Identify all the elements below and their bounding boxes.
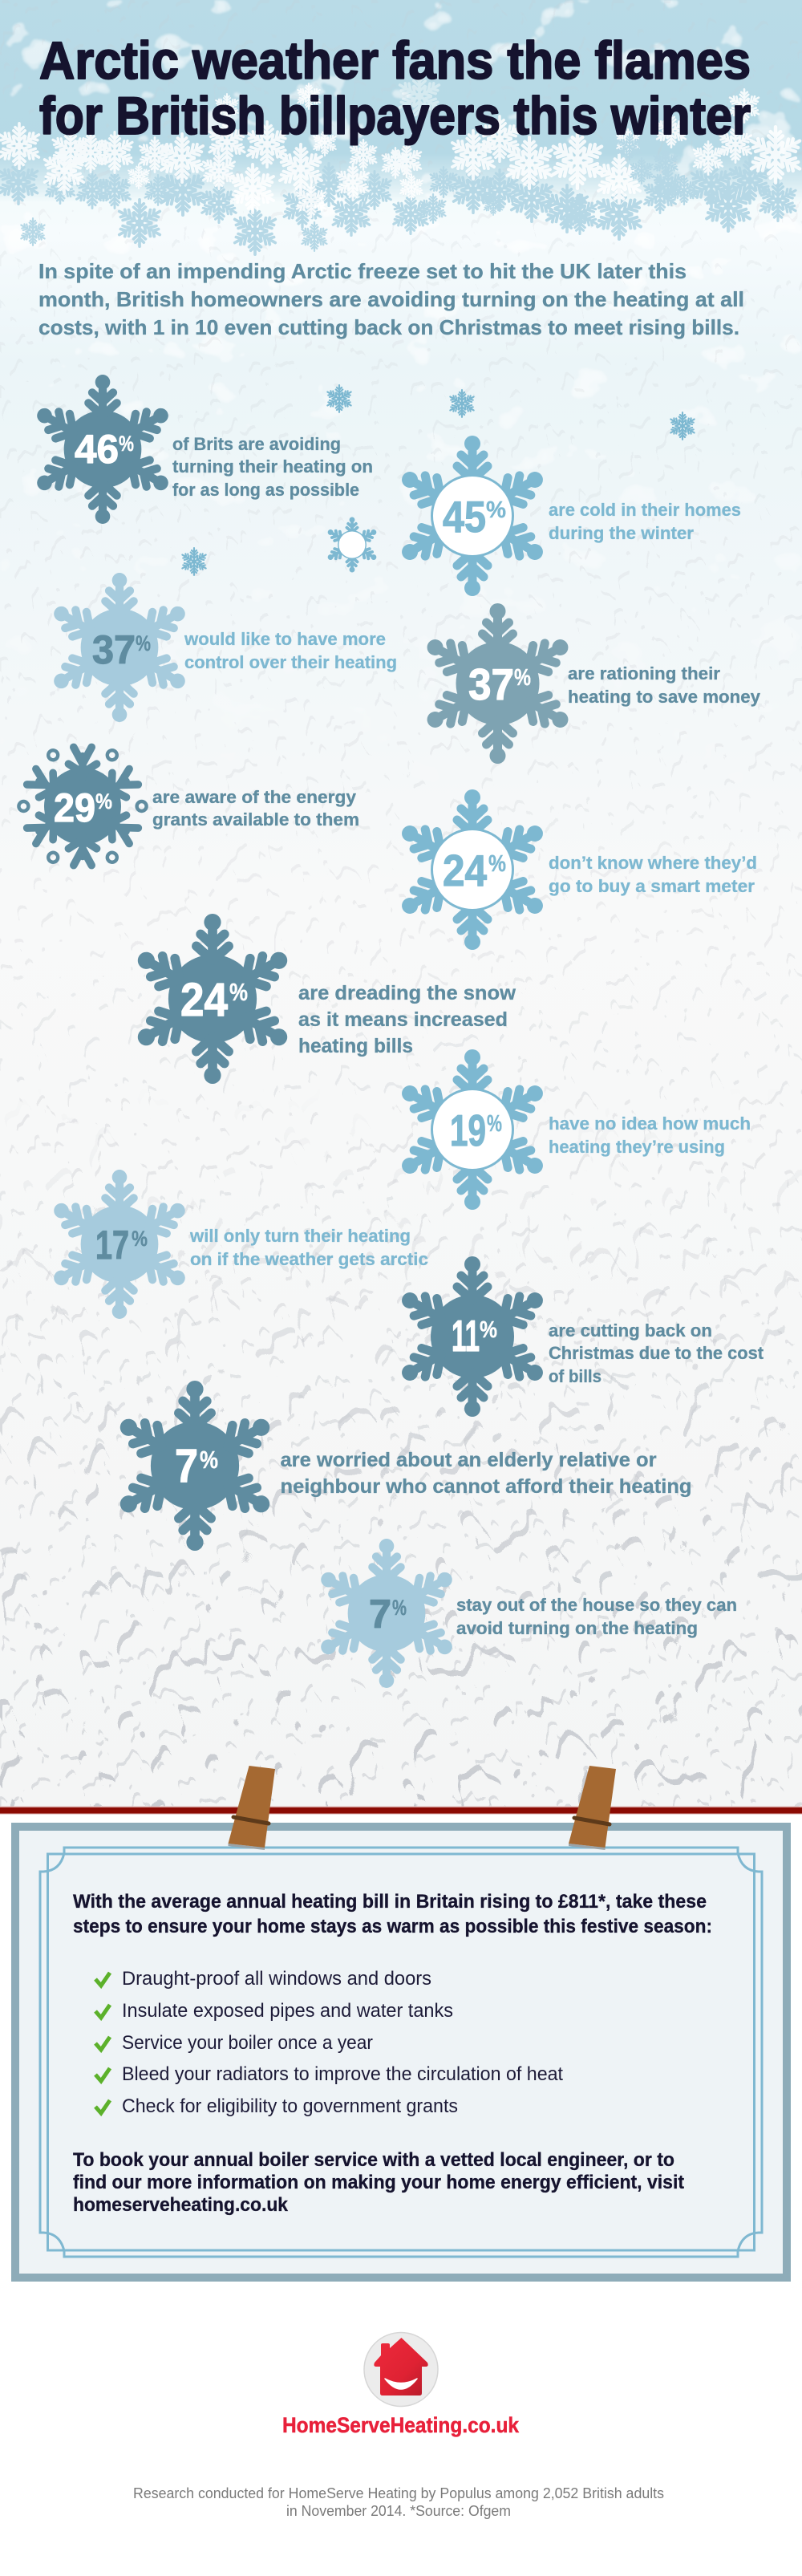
label: 37% control: would like to have more xyxy=(184,629,386,649)
label: 45%: are cold in their homes xyxy=(549,500,741,520)
source note xyxy=(133,2485,664,2519)
label: 24% snow: heating bills xyxy=(298,1035,413,1057)
clothes peg: left xyxy=(228,1766,275,1850)
intro paragraph xyxy=(38,259,744,339)
label: 37% rationing: heating to save money xyxy=(568,687,761,707)
label: 7% stay out: avoid turning on the heating xyxy=(456,1618,698,1638)
tip: check grants: Check for eligibility to government grants xyxy=(122,2095,458,2117)
stat: 45% xyxy=(399,436,741,596)
stat: 37% control xyxy=(51,573,397,722)
label: 17%: on if the weather gets arctic xyxy=(190,1249,428,1269)
label: 19%: heating they’re using xyxy=(549,1137,725,1157)
number: 24% dark: 24 xyxy=(180,974,228,1026)
number: 37% light: % xyxy=(136,631,151,655)
number: 19%: 19 xyxy=(450,1105,486,1155)
icon: snowflake 24 white xyxy=(399,789,546,950)
small decorative snowflakes xyxy=(180,385,696,575)
icon: snowflake 37 light xyxy=(51,573,188,722)
panel: heating tips xyxy=(15,1827,787,2278)
stat: 37% rationing xyxy=(424,603,761,764)
number: 17%: 17 xyxy=(95,1223,129,1268)
number: 24% white: 24 xyxy=(443,846,487,895)
icon: snowflake 37 mid xyxy=(424,603,571,764)
stat: 24% smart meter xyxy=(399,789,757,950)
label: 11% xyxy=(549,1320,764,1386)
number: 7% dark: 7 xyxy=(175,1440,198,1492)
booking call to action xyxy=(73,2149,684,2216)
label: 46%: turning their heating on xyxy=(172,456,373,477)
label: 7% elderly: neighbour who cannot afford their heating xyxy=(281,1475,691,1498)
background: frosted window xyxy=(0,0,802,1807)
label: 46% xyxy=(172,434,373,500)
label: 19%: have no idea how much xyxy=(549,1114,751,1134)
label: 37% control: control over their heating xyxy=(184,652,397,672)
label: 7% stay out: stay out of the house so they can xyxy=(456,1595,737,1615)
panel frame xyxy=(15,1827,787,2278)
intro paragraph: costs, with 1 in 10 even cutting back on Christmas to meet rising bills. xyxy=(38,315,739,339)
icon: snowflake 19 xyxy=(399,1049,546,1210)
icon: snowflake 45 xyxy=(399,436,546,596)
number: 45%: % xyxy=(486,497,506,523)
label: 37% rationing: are rationing their xyxy=(568,663,720,684)
number: 37% mid: % xyxy=(514,665,531,691)
tip: insulate: Insulate exposed pipes and water tanks xyxy=(122,2000,453,2022)
label: 11%: are cutting back on xyxy=(549,1320,712,1341)
stat: 24% snow xyxy=(135,914,516,1084)
label: 24% snow: are dreading the snow xyxy=(298,982,516,1004)
stat: 17% xyxy=(51,1170,428,1319)
number: 7% dark xyxy=(175,1440,218,1492)
label: 24% smart meter: go to buy a smart meter xyxy=(549,876,755,896)
number: 7% dark: % xyxy=(200,1446,218,1474)
number: 24% dark: % xyxy=(229,978,248,1006)
label: 29% xyxy=(152,787,359,830)
label: 24% snow: as it means increased xyxy=(298,1008,508,1031)
number: 29%: % xyxy=(95,789,112,813)
label: 24% smart meter xyxy=(549,853,757,896)
tip: draught-proof: Draught-proof all windows and doors xyxy=(122,1968,431,1990)
number: 46%: 46 xyxy=(75,427,119,472)
number: 46%: % xyxy=(119,432,134,456)
label: 7% stay out xyxy=(456,1595,737,1638)
label: 29%: grants available to them xyxy=(152,809,359,830)
label: 11%: of bills xyxy=(549,1366,602,1386)
icon: snowflake 7 light xyxy=(318,1539,455,1688)
icon: snowflake 11 xyxy=(399,1256,546,1417)
number: 7% light: % xyxy=(392,1596,407,1620)
icon: snowflake 29 with rings xyxy=(14,745,152,867)
number: 11%: 11 xyxy=(452,1311,480,1361)
number: 11%: % xyxy=(480,1317,497,1343)
stat: 19% xyxy=(399,1049,751,1210)
label: 17% xyxy=(189,1226,428,1269)
label: 11%: Christmas due to the cost xyxy=(549,1343,764,1363)
number: 37% light: 37 xyxy=(92,627,136,672)
stat: 7% stay out xyxy=(318,1539,737,1688)
snowflake band xyxy=(0,74,802,254)
number: 29%: 29 xyxy=(54,785,95,830)
label: 29%: are aware of the energy xyxy=(152,787,357,807)
label: 37% control xyxy=(184,629,397,672)
stat: 11% xyxy=(399,1256,764,1417)
number: 24% white: % xyxy=(488,851,506,877)
number: 17%: % xyxy=(132,1227,148,1251)
label: 24% smart meter: don’t know where they’d xyxy=(549,853,757,873)
title xyxy=(39,30,751,145)
panel heading: steps to ensure your home stays as warm as possible this festive season: xyxy=(73,1916,712,1937)
booking call to action: find our more information on making your home energy efficient, visit xyxy=(73,2172,684,2193)
source note: Research conducted for HomeServe Heating by Populus among 2,052 British adults xyxy=(133,2485,664,2501)
icon: snowflake 24 dark xyxy=(135,914,290,1084)
number: 45%: 45 xyxy=(443,492,486,542)
icon: snowflake 17 xyxy=(51,1170,188,1319)
label: 7% elderly: are worried about an elderly relative or xyxy=(281,1449,657,1471)
panel heading: With the average annual heating bill in Britain rising to £811*, take these xyxy=(73,1891,707,1913)
washing line xyxy=(0,1807,802,1815)
tip: bleed radiators: Bleed your radiators to improve the circulation of heat xyxy=(122,2063,563,2085)
number: 19%: % xyxy=(487,1111,502,1137)
label: 46%: of Brits are avoiding xyxy=(172,434,341,454)
booking call to action: homeserveheating.co.uk xyxy=(73,2194,289,2216)
number: 7% light: 7 xyxy=(369,1592,391,1637)
tip list xyxy=(95,1968,563,2117)
title: Arctic weather fans the flames xyxy=(39,30,751,90)
logo wordmark: HomeServeHeating.co.uk xyxy=(282,2413,520,2437)
label: 45% xyxy=(549,500,741,543)
source note: in November 2014. *Source: Ofgem xyxy=(286,2503,511,2519)
intro paragraph: month, British homeowners are avoiding turning on the heating at all xyxy=(38,287,744,311)
label: 24% snow xyxy=(298,982,516,1057)
label: 45%: during the winter xyxy=(549,523,694,543)
label: 19% xyxy=(549,1114,751,1157)
label: 17%: will only turn their heating xyxy=(189,1226,411,1246)
number: 7% light xyxy=(369,1592,407,1637)
clothes peg: right xyxy=(569,1766,616,1850)
stat: 46% xyxy=(34,375,373,524)
stat: 7% elderly xyxy=(117,1381,692,1551)
decorative double border xyxy=(40,1848,762,2257)
label: 46%: for as long as possible xyxy=(172,480,359,500)
icon: snowflake 7 dark xyxy=(117,1381,273,1551)
panel heading xyxy=(73,1891,712,1937)
number: 37% mid: 37 xyxy=(468,659,514,709)
tip: service boiler: Service your boiler once a year xyxy=(122,2032,373,2054)
icon: snowflake 46 xyxy=(34,375,171,524)
intro paragraph: In spite of an impending Arctic freeze set to hit the UK later this xyxy=(38,259,687,283)
label: 7% elderly xyxy=(281,1449,691,1498)
logo: HomeServe house xyxy=(364,2333,438,2407)
label: 37% rationing xyxy=(568,663,761,707)
booking call to action: To book your annual boiler service with a vetted local engineer, or to xyxy=(73,2149,674,2171)
stat: 29% xyxy=(14,745,359,867)
